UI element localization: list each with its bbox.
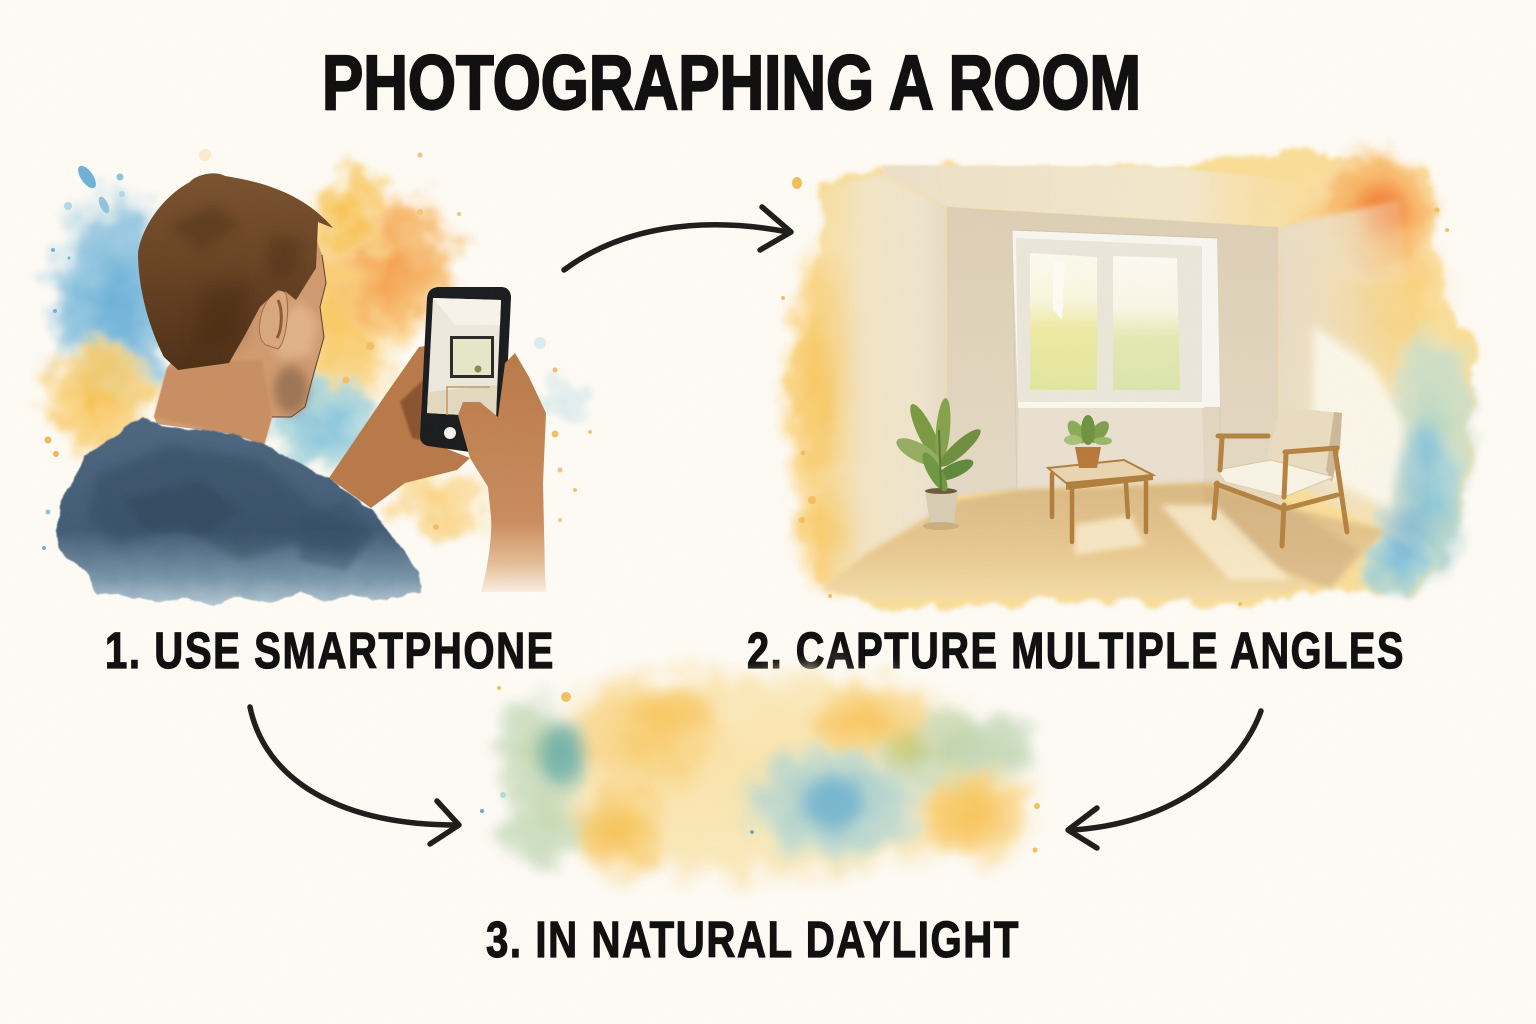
phone screen <box>427 298 501 417</box>
splash dot <box>792 177 802 189</box>
back wall <box>947 207 1278 497</box>
window <box>1012 230 1220 490</box>
orange and blue paint accents <box>1359 186 1441 559</box>
arrow: step 1 to step 2 <box>564 207 791 270</box>
plant left <box>893 398 985 530</box>
person: shirt <box>57 417 421 606</box>
floor highlights <box>1075 505 1290 580</box>
sunlight on right wall <box>1313 325 1405 510</box>
watercolor wash behind person <box>35 149 592 550</box>
panel: natural daylight watercolor wash <box>480 660 1042 890</box>
step 1 label: 1. USE SMARTPHONE <box>105 622 555 679</box>
person: hair <box>138 173 333 370</box>
title: PHOTOGRAPHING A ROOM <box>322 40 1141 126</box>
person: far hand and arm <box>329 345 470 508</box>
right wall <box>1278 200 1430 560</box>
person: near hand and arm <box>458 353 546 592</box>
arrow: step 1 to step 3 <box>250 707 459 844</box>
stubble shadow on jaw <box>274 366 308 414</box>
armchair <box>1214 407 1347 546</box>
smartphone <box>420 287 511 452</box>
paint flecks around room <box>781 208 1449 606</box>
watercolor wash around room <box>775 140 1482 612</box>
panel: room illustration <box>775 140 1482 612</box>
coffee table <box>1048 460 1153 542</box>
step 3 label: 3. IN NATURAL DAYLIGHT <box>486 911 1020 968</box>
ear <box>259 291 288 349</box>
person: neck and face <box>154 235 326 445</box>
paint splatters <box>42 149 592 550</box>
room walls and floor <box>812 165 1430 600</box>
arrow: step 2 to step 3 <box>1068 711 1261 848</box>
panel: use smartphone illustration <box>35 149 592 606</box>
plant on table <box>1064 415 1113 468</box>
left wall <box>812 173 959 590</box>
floor <box>820 483 1385 600</box>
paint flecks <box>480 686 1040 852</box>
ceiling <box>883 165 1316 227</box>
